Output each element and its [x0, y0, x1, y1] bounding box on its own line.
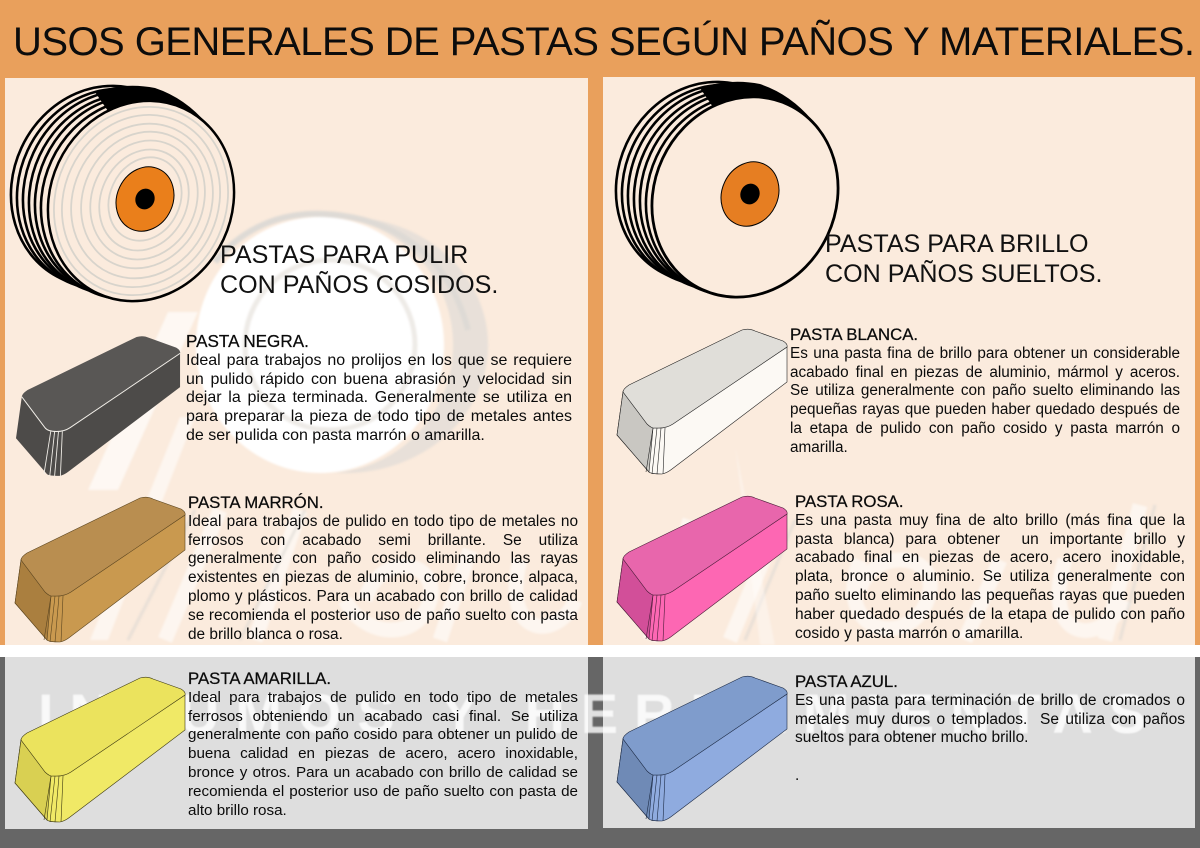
text: pasta marrón: de brillo blanca o rosa. [188, 626, 343, 643]
text: pasta amarilla: buena calidad en piezas de acero, acero inoxidable, [188, 745, 578, 762]
text: pasta azul [795, 672, 1185, 784]
text: pasta blanca: acabado final en piezas de aluminio, mármol y aceros. [790, 364, 1180, 381]
text: pasta blanca [790, 325, 1180, 456]
heading: pastas para pulir: CON PAÑOS COSIDOS. [220, 271, 498, 299]
heading: pastas para pulir [220, 241, 498, 299]
text: pasta rosa: paño suelto eliminando las pequeñas rayas que pueden [795, 587, 1185, 604]
text: pasta azul: sueltos para obtener mucho brillo. [795, 729, 1028, 746]
text: pasta amarilla: ferrosos obteniendo un acabado casi final. Se utiliza [188, 708, 578, 725]
text: pasta amarilla: Ideal para trabajos de pulido en todo tipo de metales [188, 689, 578, 706]
watermark text: INSUMOS Y HERRAMIENTAS [38, 682, 1146, 745]
text: pasta amarilla: bronce y otros. Para un acabado con brillo de calidad se [188, 764, 578, 781]
text: pasta amarilla: recomienda el posterior uso de paño suelto con pasta de [188, 783, 578, 800]
text: pasta negra: Ideal para trabajos no prolijos en los que se requiere [186, 352, 572, 369]
text: pasta marrón [188, 493, 578, 643]
text: pasta azul: Es una pasta para terminación de brillo de cromados o [795, 692, 1185, 709]
panel: left gray [5, 657, 588, 829]
text: pasta marrón: se recomienda el posterior uso de paño suelto con pasta [188, 607, 578, 624]
text: pasta blanca: Se utiliza generalmente con paño suelto eliminando las [790, 382, 1180, 399]
text: pasta rosa: plata, bronce o aluminio. Se utiliza generalmente con [795, 568, 1185, 585]
text: pasta rosa: Es una pasta muy fina de alto brillo (más fina que la [795, 512, 1185, 529]
text: pasta rosa: PASTA ROSA. [795, 492, 904, 511]
text: pasta negra: dejar la pieza terminada. Generalmente se utiliza en [186, 389, 572, 406]
text: pasta marrón: generalmente con paño cosido eliminando las rayas [188, 550, 578, 567]
text: pasta blanca: amarilla. [790, 439, 848, 456]
text: pasta amarilla: PASTA AMARILLA. [188, 669, 331, 688]
panel: left peach [5, 78, 588, 645]
text: pasta azul: metales muy duros o templados. Se utiliza con paños [795, 711, 1185, 728]
icon: stitched buffing wheel [10, 84, 236, 302]
orange background [0, 0, 1200, 646]
text: pasta marrón: plomo y plásticos. Para un acabado con brillo de calidad [188, 588, 578, 605]
text: pasta blanca: la etapa de pulido con paño cosido y pasta marrón o [790, 420, 1180, 437]
text: pasta negra: PASTA NEGRA. [186, 332, 309, 351]
text: pasta blanca: Es una pasta fina de brillo para obtener un considerable [790, 345, 1180, 362]
text: pasta blanca: PASTA BLANCA. [790, 325, 918, 344]
text: pasta rosa: cosido y pasta marrón o amarilla. [795, 625, 1023, 642]
title: USOS GENERALES DE PASTAS SEGÚN PAÑOS Y MATERIALES. [13, 19, 1195, 64]
text: pasta negra: de ser pulida con pasta marrón o amarilla. [186, 427, 485, 444]
white band [0, 645, 1200, 657]
heading: pastas para pulir: PASTAS PARA PULIR [220, 241, 468, 269]
text: pasta negra: para preparar la pieza de todo tipo de metales antes [186, 408, 572, 425]
text: pasta azul: PASTA AZUL. [795, 672, 898, 691]
text: pasta negra: un pulido rápido con buena abrasión y velocidad sin [186, 371, 572, 388]
text: pasta rosa: haber quedado después de la etapa de pulido con paño [795, 606, 1185, 623]
heading: pastas para brillo [825, 230, 1102, 288]
text: pasta blanca: pequeñas rayas que pueden haber quedado después de [790, 401, 1180, 418]
text: pasta marrón: ferrosos con acabado semi brillante. Se utiliza [188, 532, 578, 549]
text: pasta amarilla: alto brillo rosa. [188, 802, 287, 819]
text: pasta marrón: PASTA MARRÓN. [188, 493, 324, 512]
text: pasta rosa: pasta blanca) para obtener un importante brillo y [795, 531, 1185, 548]
text: pasta amarilla: generalmente con paño cosido para obtener un pulido de [188, 726, 578, 743]
panel: right gray [603, 657, 1195, 828]
heading: pastas para brillo: PASTAS PARA BRILLO [825, 230, 1089, 258]
text: pasta rosa [795, 492, 1185, 642]
icon: loose buffing wheel [614, 80, 840, 298]
text: pasta azul: . [795, 767, 799, 784]
text: pasta marrón: Ideal para trabajos de pulido en todo tipo de metales no [188, 513, 578, 530]
heading: pastas para brillo: CON PAÑOS SUELTOS. [825, 260, 1102, 288]
text: pasta marrón: existentes en piezas de aluminio, cobre, bronce, alpaca, [188, 569, 578, 586]
text: pasta amarilla [188, 669, 578, 819]
text: pasta negra [186, 332, 572, 444]
text: pasta rosa: acabado final en piezas de acero, acero inoxidable, [795, 549, 1185, 566]
panel: right peach [603, 77, 1195, 645]
